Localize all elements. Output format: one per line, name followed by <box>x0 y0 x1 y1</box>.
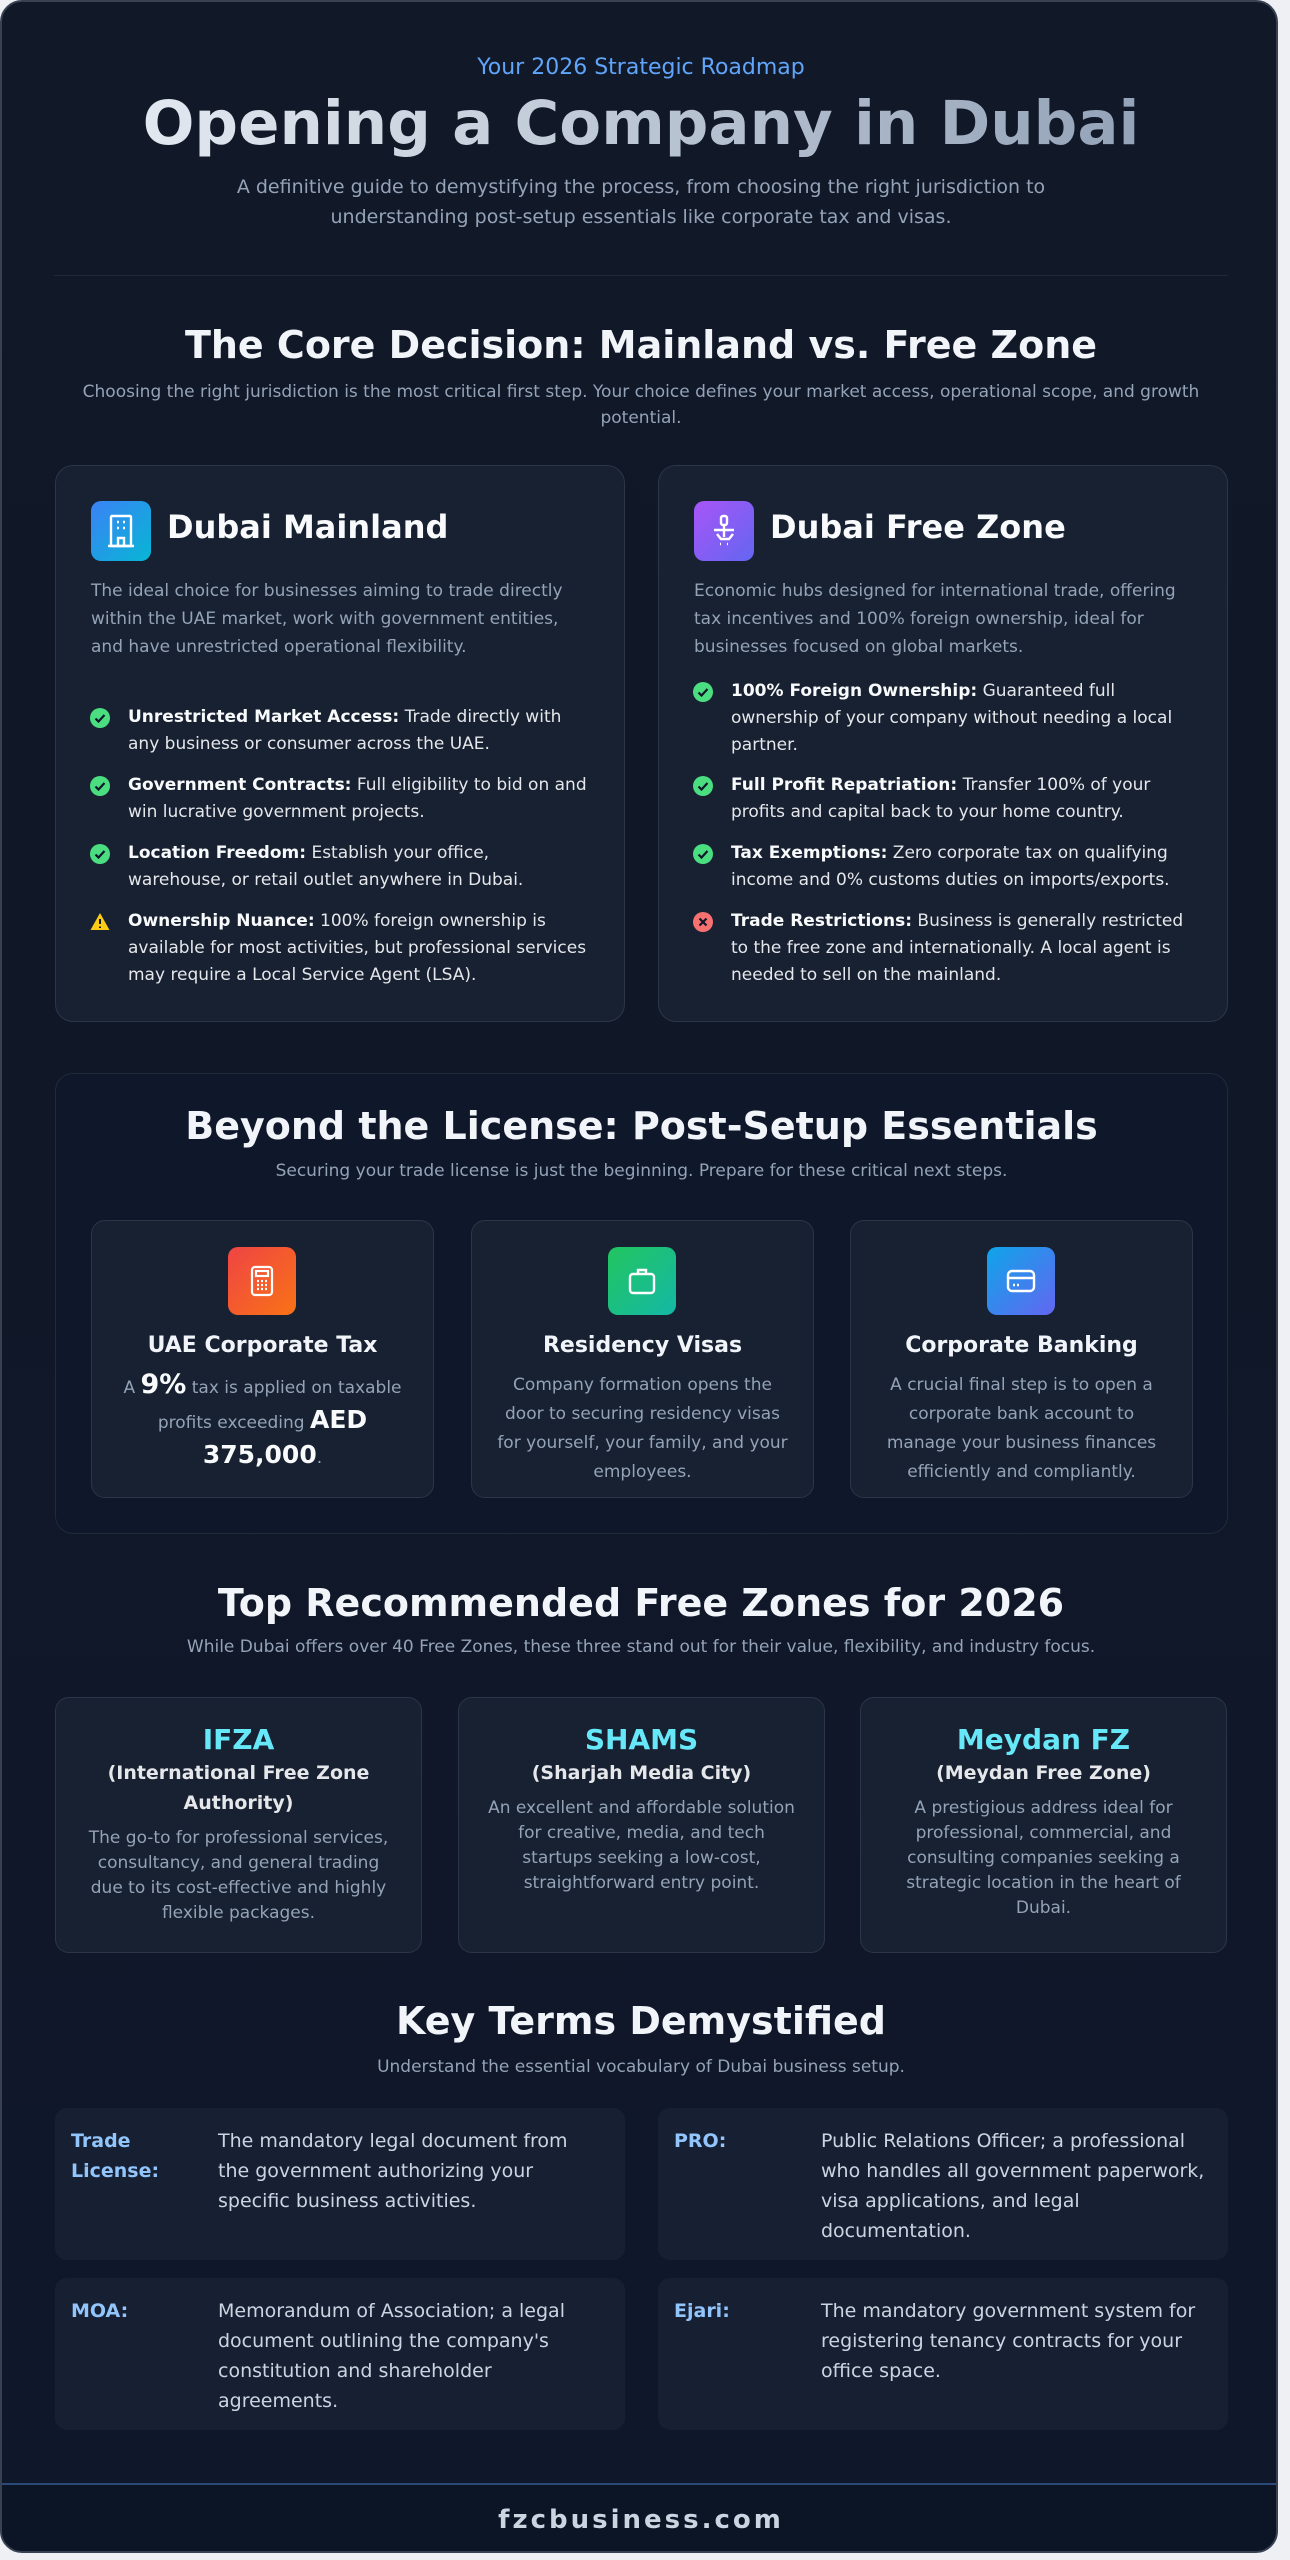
list item: may require a Local Service Agent (LSA). <box>128 965 476 985</box>
card: IFZA: (International Free Zone Authority) <box>108 1762 369 1814</box>
card: IFZA: The go-to for professional services, consultancy, and general trading due to its cost-effective and highly flexible packages. <box>89 1828 388 1923</box>
card: SHAMS <box>458 1697 825 1953</box>
term: MOA: document outlining the company's <box>218 2330 549 2352</box>
list item <box>90 707 561 754</box>
card: Meydan FZ <box>860 1697 1227 1953</box>
card: corporate tax: A 9% tax is applied on taxable profits exceeding AED 375,000. <box>123 1369 402 1469</box>
term: PRO: PRO: <box>674 2130 726 2152</box>
panel: Dubai Free Zone <box>658 465 1228 1022</box>
term: PRO: documentation. <box>821 2220 971 2242</box>
description: Economic hubs designed for international trade, offering tax incentives and 100% foreign ownership, ideal for businesses focused on global markets. <box>694 581 1176 657</box>
list item: win lucrative government projects. <box>128 802 425 822</box>
list item: any business or consumer across the UAE. <box>128 734 490 754</box>
term: MOA <box>55 2278 625 2430</box>
term: Ejari: registering tenancy contracts for your <box>821 2330 1182 2352</box>
list item: partner. <box>731 735 798 755</box>
list item: ownership of your company without needing a local <box>731 708 1172 728</box>
panel: post-setup essentials <box>55 1073 1228 1534</box>
list item: Location Freedom: Establish your office, <box>128 843 489 863</box>
icon: building <box>91 501 151 561</box>
card: IFZA: IFZA <box>203 1723 274 1756</box>
panel: Dubai Mainland <box>55 465 625 1022</box>
card: Meydan FZ: Meydan FZ <box>957 1723 1130 1756</box>
list item: available for most activities, but professional services <box>128 938 586 958</box>
card: corporate banking: A crucial final step is to open a corporate bank account to manage your business finances efficiently and compliantly. <box>887 1375 1156 1482</box>
list item: needed to sell on the mainland. <box>731 965 1001 985</box>
icon: card <box>987 1247 1055 1315</box>
term: PRO: visa applications, and legal <box>821 2190 1080 2212</box>
list item: 100% Foreign Ownership: Guaranteed full <box>731 681 1115 701</box>
card: corporate tax <box>91 1220 434 1498</box>
kicker: Your 2026 Strategic Roadmap <box>477 55 805 80</box>
heading: Dubai Free Zone <box>770 508 1066 546</box>
card: SHAMS: An excellent and affordable solution for creative, media, and tech startups seeking a low-cost, straightforward entry point. <box>488 1798 795 1893</box>
list item <box>90 843 523 890</box>
icon: calculator <box>228 1247 296 1315</box>
card: residency visas: Company formation opens the door to securing residency visas for yourself, your family, and your employees. <box>497 1375 788 1482</box>
heading: free zones: Top Recommended Free Zones for 2026 <box>218 1581 1064 1625</box>
term: PRO: who handles all government paperwork, <box>821 2160 1204 2182</box>
list item: to the free zone and internationally. A local agent is <box>731 938 1171 958</box>
card: SHAMS: SHAMS <box>585 1723 698 1756</box>
card: IFZA <box>55 1697 422 1953</box>
term: Ejari <box>658 2278 1228 2430</box>
term: MOA: constitution and shareholder <box>218 2360 492 2382</box>
footer <box>2 2483 1280 2555</box>
list item: Trade Restrictions: Business is generally restricted <box>731 911 1183 931</box>
list item: warehouse, or retail outlet anywhere in Dubai. <box>128 870 523 890</box>
subtitle: core decision: Choosing the right jurisdiction is the most critical first step. Your choice defines your market access, operational scope, and growth potential. <box>83 382 1199 428</box>
list item: Full Profit Repatriation: Transfer 100% of your <box>731 775 1150 795</box>
term: Ejari: Ejari: <box>674 2300 730 2322</box>
list item <box>90 911 586 985</box>
term: MOA: agreements. <box>218 2390 338 2412</box>
footer brand: fzcbusiness.com <box>498 2505 784 2535</box>
list item: Ownership Nuance: 100% foreign ownership is <box>128 911 546 931</box>
card: residency visas <box>471 1220 814 1498</box>
list item <box>693 681 1172 755</box>
card: Meydan FZ: A prestigious address ideal for professional, commercial, and consulting companies seeking a strategic location in the heart of Dubai. <box>906 1798 1181 1918</box>
card: SHAMS: (Sharjah Media City) <box>532 1762 751 1784</box>
icon: suitcase <box>608 1247 676 1315</box>
term: Trade License: Trade License: <box>71 2130 159 2182</box>
intro text: A definitive guide to demystifying the process, from choosing the right jurisdiction to understanding post-setup essentials like corporate tax and visas. <box>237 176 1045 228</box>
term: MOA: Memorandum of Association; a legal <box>218 2300 565 2322</box>
term: Trade License: The mandatory legal document from <box>218 2130 568 2152</box>
subtitle: free zones: While Dubai offers over 40 Free Zones, these three stand out for their value, flexibility, and industry focus. <box>187 1637 1095 1657</box>
icon: free zone <box>694 501 754 561</box>
card: Meydan FZ: (Meydan Free Zone) <box>936 1762 1151 1784</box>
list item: Tax Exemptions: Zero corporate tax on qualifying <box>731 843 1168 863</box>
subtitle: Securing your trade license is just the beginning. Prepare for these critical next steps. <box>276 1161 1007 1181</box>
list item: Unrestricted Market Access: Trade directly with <box>128 707 561 727</box>
list item <box>693 911 1183 985</box>
card: residency visas: Residency Visas <box>543 1333 742 1358</box>
heading: Beyond the License: Post-Setup Essentials <box>185 1104 1098 1148</box>
term: Trade License <box>55 2108 625 2260</box>
heading: core decision: The Core Decision: Mainland vs. Free Zone <box>185 323 1097 367</box>
list item <box>693 775 1150 822</box>
heading: Dubai Mainland <box>167 508 448 546</box>
description: The ideal choice for businesses aiming to trade directly within the UAE market, work with government entities, and have unrestricted operational flexibility. <box>91 581 563 657</box>
term: PRO <box>658 2108 1228 2260</box>
term: Ejari: office space. <box>821 2360 941 2382</box>
term: Ejari: The mandatory government system for <box>821 2300 1195 2322</box>
list item <box>693 843 1170 890</box>
card: corporate banking <box>850 1220 1193 1498</box>
card: corporate banking: Corporate Banking <box>905 1333 1138 1358</box>
card: corporate tax: UAE Corporate Tax <box>148 1333 377 1358</box>
term: Trade License: specific business activities. <box>218 2190 476 2212</box>
heading: key terms: Key Terms Demystified <box>396 1999 886 2043</box>
list item: profits and capital back to your home country. <box>731 802 1124 822</box>
title: Opening a Company in Dubai <box>143 88 1139 159</box>
list item <box>90 775 587 822</box>
list item: Government Contracts: Full eligibility to bid on and <box>128 775 587 795</box>
term: Trade License: the government authorizing your <box>218 2160 533 2182</box>
term: MOA: MOA: <box>71 2300 128 2322</box>
term: PRO: Public Relations Officer; a professional <box>821 2130 1185 2152</box>
list item: income and 0% customs duties on imports/exports. <box>731 870 1170 890</box>
subtitle: key terms: Understand the essential vocabulary of Dubai business setup. <box>377 2057 905 2077</box>
